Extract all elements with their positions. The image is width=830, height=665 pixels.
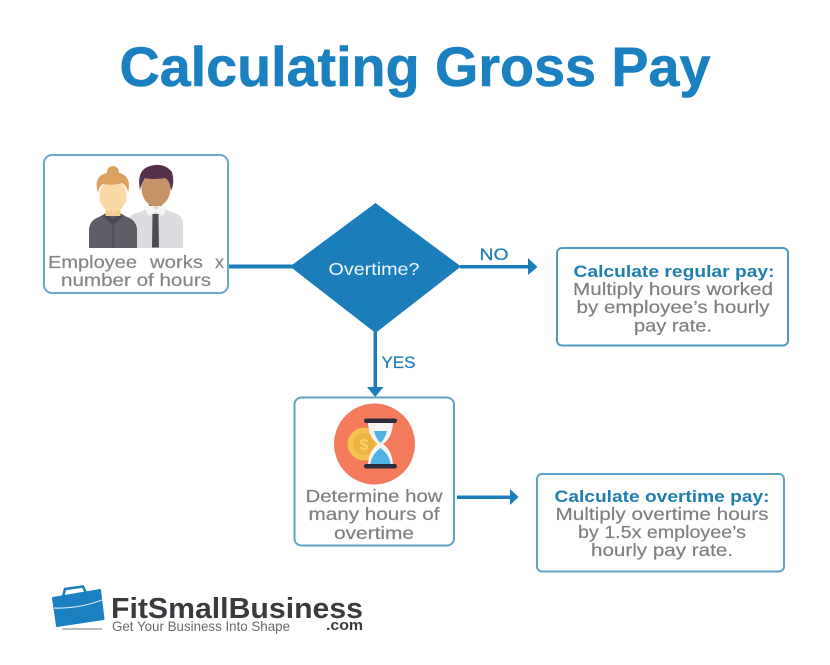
arrow: no: NO [480, 245, 508, 264]
logo: Fit Small Business: FitSmallBusiness [111, 593, 363, 625]
icon: hourglass and coin: $ [360, 437, 369, 454]
text: employee works [48, 252, 224, 290]
arrow: yes: YES [382, 353, 416, 372]
decision diamond [290, 203, 461, 333]
text: employee works: works [149, 252, 203, 272]
connector: employee box to decision [228, 264, 294, 268]
text: determine hours [306, 486, 443, 543]
title: Calculating Gross Pay [120, 35, 710, 98]
logo: Fit Small Business [53, 586, 363, 634]
panel: calculate regular pay: pay rate. [634, 316, 712, 336]
panel: determine overtime hours [294, 398, 454, 546]
panel: calculate overtime pay: hourly pay rate. [591, 540, 733, 560]
icon: briefcase [53, 586, 104, 630]
logo: Fit Small Business: Get Your Business Into Shape [112, 618, 290, 634]
panel: calculate regular pay: by employee’s hourly [576, 297, 770, 317]
text: determine hours: overtime [334, 523, 414, 543]
panel: calculate regular pay [557, 248, 788, 346]
arrow: to overtime pay [457, 489, 518, 505]
decision diamond: Overtime? [328, 259, 420, 279]
arrow: yes [367, 332, 416, 397]
text: employee works: Employee [48, 252, 137, 272]
text: determine hours: Determine how [306, 486, 443, 506]
panel: calculate overtime pay [537, 474, 784, 572]
icon: two employees [89, 165, 183, 248]
panel: calculate regular pay: Multiply hours worked [573, 279, 773, 299]
panel: calculate overtime pay: Multiply overtime hours [556, 504, 769, 524]
panel: calculate overtime pay: by 1.5x employee’s [578, 522, 746, 542]
icon: hourglass and coin [334, 404, 415, 484]
panel: employee works hours [44, 155, 228, 293]
logo: Fit Small Business: .com [326, 617, 363, 634]
panel: calculate regular pay: Calculate regular pay: [574, 262, 774, 281]
text: employee works: number of hours [61, 270, 211, 290]
text: determine hours: many hours of [308, 504, 440, 524]
text: employee works: x [215, 252, 224, 272]
panel: calculate overtime pay: Calculate overtime pay: [554, 487, 770, 506]
arrow: no [460, 245, 538, 275]
